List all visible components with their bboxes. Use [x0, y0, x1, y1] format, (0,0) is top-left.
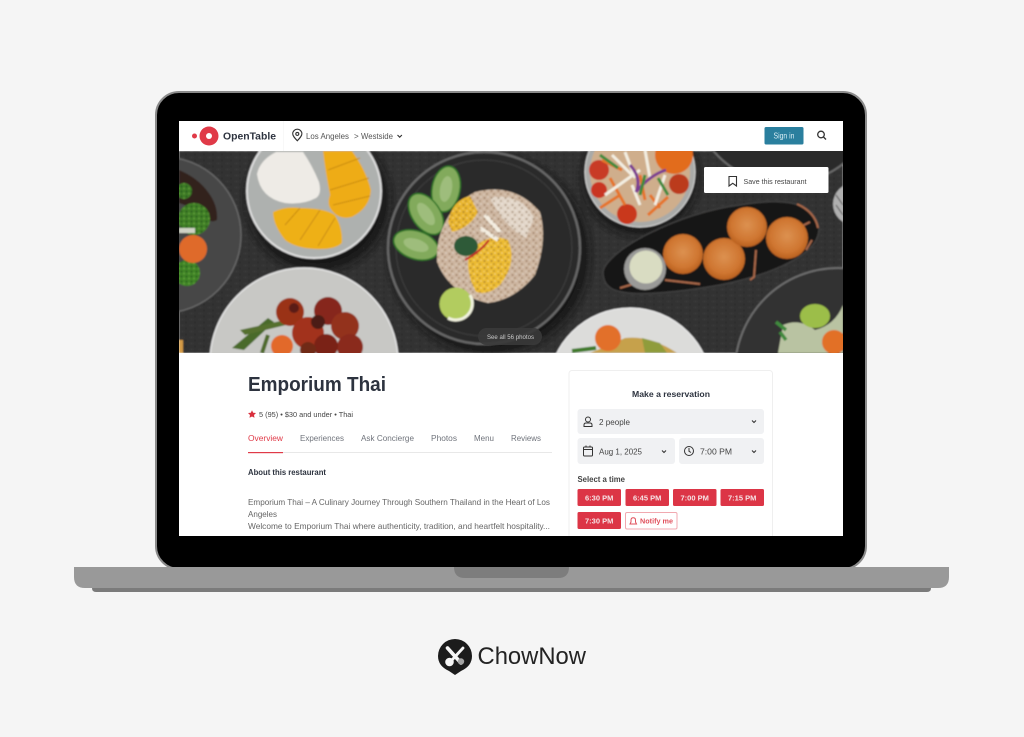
rating row: 5 (95) • $30 and under • Thai [259, 410, 353, 419]
section tabs [248, 433, 552, 453]
chownow logo [438, 639, 587, 675]
patterned bowl at right edge [832, 185, 843, 223]
section tabs: Experiences [300, 433, 344, 443]
section tabs: Menu [474, 433, 494, 443]
centre plate with fried rice [388, 152, 580, 344]
laptop lid and bezel [156, 92, 866, 569]
website screen [179, 151, 843, 536]
time selector: 7:00 PM [700, 446, 732, 456]
about text: Welcome to Emporium Thai where authenticity, tradition, and heartfelt hospitality... [248, 521, 550, 531]
icon: search [818, 131, 826, 140]
mango sticky rice plate [244, 151, 384, 260]
lower left plate with glazed chicken [208, 266, 400, 353]
location breadcrumb: Los Angeles [306, 131, 349, 141]
laptop [74, 92, 949, 592]
restaurant name: Emporium Thai [248, 373, 386, 396]
about text: Angeles [248, 509, 277, 519]
restaurant details column [248, 373, 552, 531]
laptop base [74, 567, 949, 588]
section tabs: Overview [248, 433, 284, 443]
notify me button: Notify me [640, 516, 673, 526]
time selector [679, 438, 764, 464]
section tabs: Reviews [511, 433, 541, 443]
save this restaurant button: Save this restaurant [744, 177, 807, 186]
about heading: About this restaurant [248, 468, 326, 477]
about text: Emporium Thai – A Culinary Journey Through Southern Thailand in the Heart of Los [248, 497, 550, 507]
time slot buttons: 6:30 PM [585, 494, 613, 502]
section tabs: Ask Concierge [361, 433, 414, 443]
about text [248, 497, 550, 531]
location breadcrumb [306, 131, 402, 141]
sign in button: Sign in [774, 132, 794, 140]
save this restaurant button [704, 167, 828, 193]
icon: bookmark [729, 176, 736, 186]
location breadcrumb: > [354, 132, 359, 141]
time slot buttons [578, 489, 764, 529]
party size selector [578, 409, 764, 434]
left plate with broccoli [179, 158, 242, 312]
time slot buttons: 7:30 PM [585, 516, 613, 526]
time slot buttons: 7:15 PM [728, 494, 756, 502]
select a time label: Select a time [578, 475, 626, 484]
hero food photo [179, 151, 843, 353]
salad bowl [583, 151, 697, 229]
party size selector: 2 people [599, 417, 630, 427]
date selector [578, 438, 675, 464]
time slot buttons: 7:00 PM [681, 494, 709, 502]
reservation card [568, 370, 773, 536]
card heading: Make a reservation [632, 389, 710, 399]
opentable logo [192, 126, 276, 146]
navigation bar [179, 121, 843, 151]
laptop base underside [92, 588, 931, 592]
section tabs: Photos [431, 433, 457, 443]
location breadcrumb: Westside [361, 131, 393, 141]
notify me button [626, 512, 677, 529]
bottom right plate with salad [735, 266, 843, 353]
top right dark plate [691, 0, 879, 184]
date selector: Aug 1, 2025 [599, 446, 642, 456]
laptop notch [454, 567, 569, 578]
icon: chownow pin with fork and spoon [438, 639, 472, 675]
bottom centre plate with noodles [555, 306, 705, 353]
sign in button [764, 127, 804, 144]
chownow wordmark: ChowNow [478, 643, 587, 670]
time slot buttons: 6:45 PM [633, 494, 661, 502]
icon: location pin [293, 129, 302, 141]
see all photos pill: See all 56 photos [487, 334, 535, 341]
orange sliver at corner [179, 340, 183, 353]
oval dish with fried pastries [603, 202, 819, 294]
opentable logo: OpenTable [223, 130, 276, 142]
see all photos pill [478, 328, 542, 345]
